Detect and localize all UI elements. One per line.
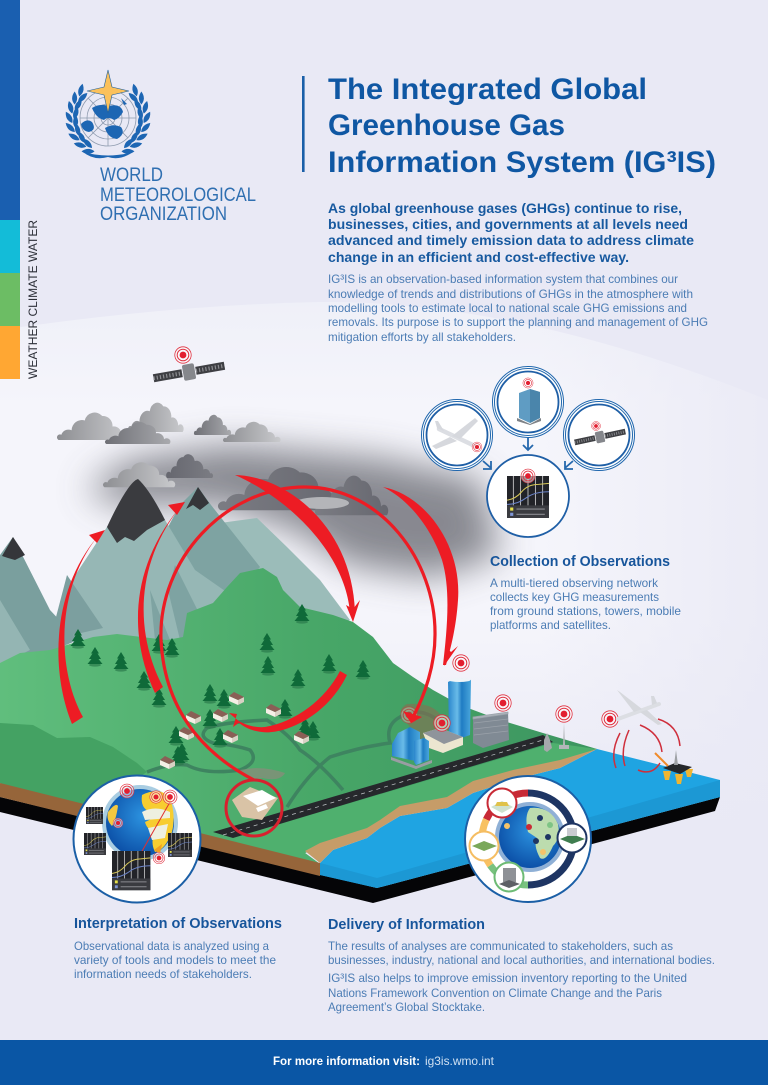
collection text block: platforms and satellites. [490,618,611,632]
interpretation text block [74,916,282,981]
intro body text: removals. Its purpose is to support the planning and management of GHG [328,315,708,329]
city buildings [391,678,509,769]
intro body text: knowledge of trends and distributions of GHGs in the atmosphere with [328,287,693,301]
WMO logo [64,70,152,158]
continents [526,808,559,859]
delivery text block: Agreement’s Global Stocktake. [328,1000,485,1014]
collection text block: Collection of Observations [490,554,670,570]
title: The Integrated Global [328,73,647,106]
plane over ocean [617,690,662,725]
water and beach [305,749,720,888]
intro body text: IG³IS is an observation-based information system that combines our [328,272,678,286]
intro body text: mitigation efforts by all stakeholders. [328,330,516,344]
lead paragraph: advanced and timely emission data to address climate [328,232,694,248]
lead paragraph [328,200,694,265]
lead paragraph: businesses, cities, and governments at all levels need [328,216,688,232]
circle: satellite [564,400,634,470]
smog layer [85,445,500,578]
radio tower and chimney [544,723,569,752]
delivery text block [328,917,715,1014]
arrow: hill to village [229,671,347,732]
blue cluster [392,727,420,762]
interpretation text block: variety of tools and models to meet the [74,953,276,967]
vertical tagline: WEATHER CLIMATE WATER [26,220,40,379]
footer band: ig3is.wmo.int [425,1054,495,1068]
left colour bar [0,0,20,379]
delivery text block: IG³IS also helps to improve emission inventory reporting to the United [328,971,687,985]
interpretation text block: information needs of stakeholders. [74,967,252,981]
second peak [140,487,260,660]
title: Greenhouse Gas [328,109,565,142]
oil rig [655,750,693,784]
title: Information System (IG³IS) [328,146,716,179]
title divider [302,76,305,172]
title [328,73,716,179]
road [213,735,553,838]
delivery text block: businesses, industry, national and local authorities, and international bodies. [328,953,715,967]
lead paragraph: change in an efficient and cost-effective way. [328,249,629,265]
big peak [60,479,238,640]
collection text block: from ground stations, towers, mobile [490,604,681,618]
arrow: left emission rising to peak [58,530,105,724]
left peak [0,537,78,670]
arrow: large loop from refinery [161,487,435,780]
intro body text: modelling tools to estimate local to national scale GHG emissions and [328,301,687,315]
stakeholder ring [482,793,574,885]
circle: aircraft [422,400,492,470]
land front edge [0,783,320,876]
WMO name: WORLD [100,165,163,186]
winding paths [147,712,440,807]
red measurement arcs [614,719,680,772]
interpretation globe circle [74,776,200,902]
arrow: smog descending to city [383,487,458,666]
circle: data chart [487,455,569,537]
tall tower [448,678,471,739]
WMO name: ORGANIZATION [100,204,227,225]
small middle peak [50,575,103,640]
land surface [0,568,597,864]
icon: UN style globe and wreath [64,83,152,158]
icon: satellite in sky [152,347,226,386]
footer band [0,1040,768,1085]
lead paragraph: As global greenhouse gases (GHGs) continue to rise, [328,200,682,216]
refinery [232,768,285,820]
interpretation text block: Interpretation of Observations [74,916,282,932]
collection text block: collects key GHG measurements [490,590,659,604]
arrow: second emission rising [138,502,185,693]
grey office [473,712,509,748]
arrows into chart [483,438,573,469]
collection text block [490,554,681,632]
base block under terrain [0,797,720,903]
delivery text block: Delivery of Information [328,917,485,933]
red flow arrows [58,475,458,836]
WMO name [100,165,256,225]
arrow: smog descending to hill [235,475,360,622]
circle: building [492,366,564,438]
trees [70,604,370,766]
beacons [401,655,618,731]
low white complex [423,728,463,753]
houses [160,692,309,769]
collection icons group [422,366,634,537]
WMO name: METEOROLOGICAL [100,185,256,206]
delivery text block: Nations Framework Convention on Climate Change and the Paris [328,986,662,1000]
intro body text [328,272,708,344]
delivery text block: The results of analyses are communicated to stakeholders, such as [328,939,673,953]
foreground right field [233,743,597,864]
red circle around refinery [226,780,282,836]
icon: compass star [87,70,129,113]
delivery globe circle [465,776,591,902]
sector badges [470,788,586,892]
mountains [0,479,350,670]
foreground dark hill [0,723,147,815]
collection text block: A multi-tiered observing network [490,576,658,590]
clouds [57,403,388,515]
interpretation text block: Observational data is analyzed using a [74,939,269,953]
back ridge [200,518,350,640]
footer band: For more information visit: [273,1054,420,1068]
